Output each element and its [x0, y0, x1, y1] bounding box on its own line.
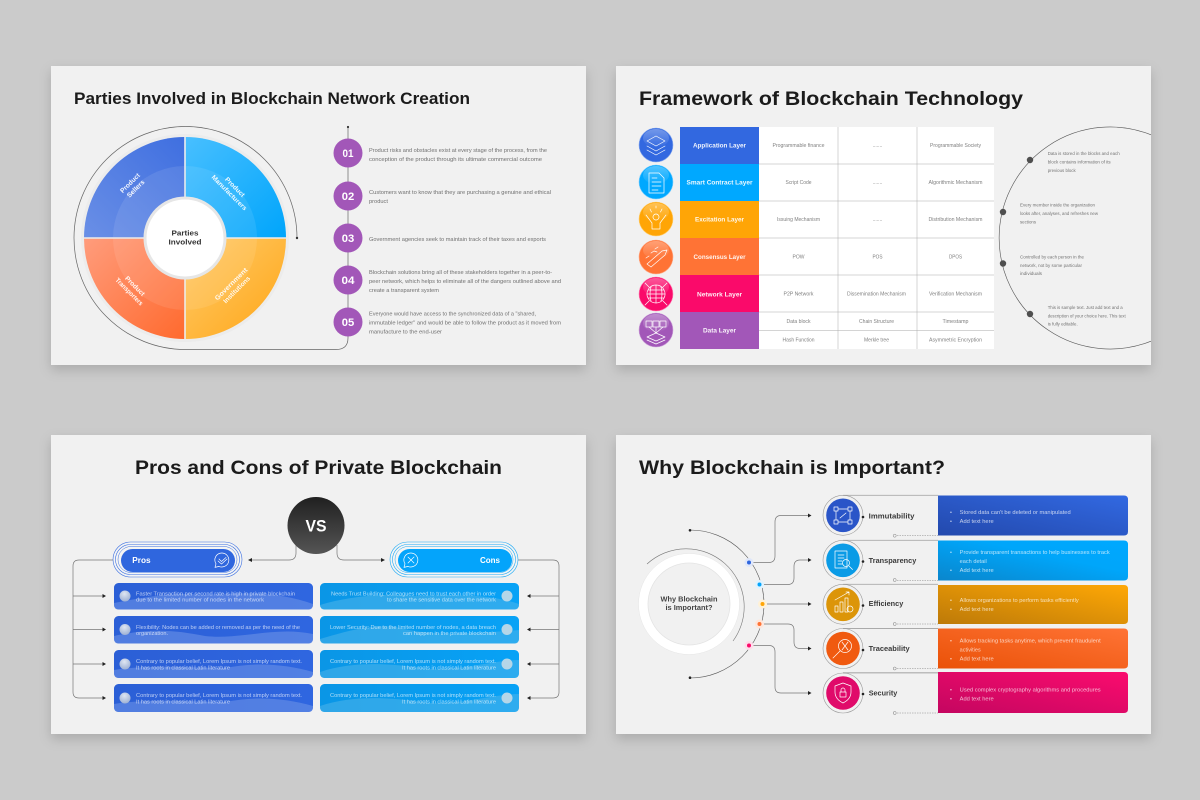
row: efficiency — [823, 584, 1128, 626]
pros row 2: Flexibility: Nodes can be added or removed as per the need of the — [136, 625, 300, 631]
panel: why blockchain is important — [616, 435, 1151, 734]
timeline end dot — [347, 126, 349, 128]
note 4: description of your choice here. This text — [1048, 314, 1126, 318]
description: immutability: Stored data can't be deleted or manipulated — [960, 510, 1071, 516]
step 04: peer network, which helps to eliminate all of the dangers outlined above and — [369, 279, 561, 285]
title: why blockchain: Why Blockchain is Important? — [639, 458, 945, 479]
cons row 2 — [320, 616, 519, 644]
central circle: Why Blockchain — [660, 594, 718, 604]
panel: framework of blockchain technology — [616, 66, 1151, 365]
table cells: Dissemination Mechanism — [847, 292, 906, 298]
layer: excitation — [680, 201, 759, 238]
pros row 1 — [114, 583, 313, 610]
step 05: 05 — [342, 317, 354, 329]
description: security: Add text here — [960, 696, 994, 702]
arc end dot — [296, 237, 298, 239]
icon: traceability — [826, 632, 860, 665]
pros row 3: Contrary to popular belief, Lorem Ipsum is not simply random text. — [136, 659, 302, 665]
note 4: This is sample text. Just add text and a — [1048, 305, 1123, 310]
icon: cross bubble — [404, 553, 418, 567]
cons pill — [390, 542, 518, 577]
description: traceability: • — [950, 656, 952, 662]
table cells: Asymmetric Encryption — [929, 338, 982, 344]
cons row 3: Contrary to popular belief, Lorem Ipsum is not simply random text. — [330, 659, 496, 665]
pros row 1: due to the limited number of nodes in the network — [136, 597, 264, 603]
step 02 — [334, 182, 551, 210]
step 04: Blockchain solutions bring all of these stakeholders together in a peer-to- — [369, 270, 552, 276]
step 03 — [334, 224, 546, 252]
node dots — [744, 558, 767, 650]
segment: product transporters: Transporters — [114, 277, 144, 308]
description: traceability: • — [950, 638, 952, 644]
note 2: sections — [1020, 220, 1037, 224]
table cells: Programmable finance — [772, 143, 825, 149]
segment: government institutions: Government — [214, 266, 250, 302]
description: security: • — [950, 696, 952, 702]
segment: product transporters: Product — [123, 275, 146, 298]
step 02: 02 — [342, 191, 354, 203]
description: efficiency: Allows organizations to perform tasks efficiently — [960, 598, 1079, 604]
layer: application: Application Layer — [693, 142, 746, 150]
step 04: create a transparent system — [369, 288, 439, 294]
table cells: P2P Network — [784, 292, 814, 298]
layer: smart contract — [680, 164, 759, 201]
icon: smart contract document — [639, 165, 673, 199]
segment: product sellers — [84, 137, 184, 237]
note 1: previous block — [1048, 168, 1076, 173]
step 01: 01 — [342, 148, 354, 160]
description: efficiency: • — [950, 607, 952, 613]
table — [680, 127, 994, 349]
table cells: DPOS — [949, 254, 963, 260]
layer icons — [639, 128, 673, 347]
cons row 1: to share the sensitive data over the network — [387, 597, 496, 603]
note 2 — [1020, 202, 1099, 224]
table cells: Verification Mechanism — [929, 292, 982, 298]
note 4 — [1048, 305, 1126, 326]
layer: consensus: Consensus Layer — [694, 254, 746, 261]
description: transparency: Add text here — [960, 568, 994, 574]
cons pill: Cons — [480, 556, 501, 565]
step 03: 03 — [342, 233, 354, 245]
table cells: Programmable Society — [930, 143, 982, 149]
layer: consensus — [680, 238, 759, 275]
step 02: Customers want to know that they are purchasing a genuine and ethical — [369, 190, 551, 196]
table cells: Hash Function — [782, 338, 815, 344]
table cells: ....... — [873, 217, 882, 223]
step 01 — [334, 138, 547, 168]
description: traceability: Add text here — [960, 656, 994, 662]
pros row 2 — [114, 616, 313, 644]
wheel centre: Involved — [168, 238, 202, 246]
row: immutability: Immutability — [869, 512, 915, 520]
step 02: product — [369, 199, 388, 205]
cons row 3: It has roots in classical Latin literature — [402, 665, 496, 671]
VS badge: VS — [306, 518, 326, 536]
step 03: Government agencies seek to maintain track of their taxes and exports — [369, 237, 546, 243]
note 1 — [1048, 151, 1120, 173]
row: efficiency: Efficiency — [869, 599, 904, 608]
segment: product manufacturers: Manufacturers — [210, 174, 248, 213]
description: immutability — [938, 496, 1128, 536]
note 3 — [1020, 254, 1084, 276]
row: immutability — [823, 495, 1128, 537]
table cells: Distribution Mechanism — [928, 217, 982, 223]
cons row 1: Needs Trust Building: Colleagues need to trust each other in order — [331, 592, 496, 598]
description: security — [938, 672, 1128, 713]
pros row 3: It has roots in classical Latin literature — [136, 665, 230, 671]
connectors — [752, 514, 812, 695]
description: transparency: each detail — [960, 559, 987, 565]
cons row 2: Lower Security: Due to the limited number of nodes, a data breach — [330, 625, 496, 631]
step 05: manufacture to the end-user — [369, 330, 442, 336]
segment: product sellers: Sellers — [126, 179, 147, 199]
icon: immutability — [826, 498, 860, 532]
description: traceability — [938, 628, 1128, 668]
central circle: is Important? — [666, 603, 713, 612]
table cells: Timestamp — [942, 319, 969, 325]
layer: data — [680, 312, 759, 349]
pros pill — [113, 542, 242, 577]
icon: check bubble — [215, 553, 229, 567]
connector arc and timeline line — [74, 127, 348, 349]
step 05: immutable ledger" and would be able to follow the product as it moved from — [369, 320, 561, 326]
cons row 4 — [320, 684, 519, 712]
icon: application layer stack — [639, 128, 673, 162]
note 4: is fully editable. — [1048, 322, 1078, 326]
segment: product manufacturers: Product — [223, 176, 246, 199]
step 04: 04 — [342, 275, 355, 287]
note 2: looks after, analyses, and refreshes new — [1020, 211, 1099, 216]
cons row 1 — [320, 583, 519, 610]
table cells: Algorithmic Mechanism — [928, 180, 982, 186]
wheel diagram — [81, 134, 289, 342]
layer: data: Data Layer — [703, 328, 736, 334]
pros row 4 — [114, 684, 313, 712]
step 01: Product risks and obstacles exist at every stage of the process, from the — [369, 148, 547, 154]
segment: government institutions — [186, 239, 286, 339]
pros row 3 — [114, 650, 313, 678]
step 05 — [334, 308, 561, 336]
icon: transparency — [826, 544, 860, 577]
row: traceability — [823, 628, 1128, 670]
layer: network: Network Layer — [697, 292, 742, 298]
segment: government institutions: Institutions — [222, 275, 252, 305]
description: efficiency: Add text here — [960, 607, 994, 613]
table cells: ....... — [873, 180, 882, 186]
title: pros and cons: Pros and Cons of Private Blockchain — [135, 458, 502, 479]
description: transparency: Provide transparent transactions to help businesses to track — [960, 550, 1110, 556]
VS badge — [288, 497, 344, 554]
description: immutability: • — [950, 519, 952, 525]
row: transparency: Transparency — [869, 556, 917, 565]
table cells — [772, 143, 982, 344]
layer: network — [680, 275, 759, 312]
note 3: network, not by some particular — [1020, 263, 1082, 268]
title: framework: Framework of Blockchain Technology — [639, 88, 1023, 110]
table cells: Script Code — [786, 180, 812, 186]
cons row 2: can happen in the private blockchain — [403, 631, 496, 637]
description: transparency: • — [950, 550, 952, 556]
table cells: POS — [872, 254, 883, 260]
icon: network globe — [639, 277, 673, 311]
description: traceability: activities — [960, 648, 981, 654]
central circle — [638, 554, 740, 654]
description: transparency: • — [950, 568, 952, 574]
step 04 — [334, 266, 561, 294]
cons row 3 — [320, 650, 519, 678]
note 2: Every member inside the organization — [1020, 202, 1095, 208]
wheel centre — [144, 196, 226, 280]
description: traceability: Allows tracking tasks anytime, which prevent fraudulent — [960, 638, 1101, 644]
icon: consensus hands — [639, 240, 673, 274]
description: immutability: • — [950, 510, 952, 516]
pros pill: Pros — [132, 556, 151, 565]
step 05: Everyone would have access to the synchronized data of a "shared, — [369, 312, 536, 318]
arcs — [647, 529, 764, 679]
step 01: conception of the product through its ultimate commercial outcome — [369, 157, 542, 163]
row: security: Security — [869, 688, 898, 698]
table body — [680, 127, 994, 349]
segment: product manufacturers — [186, 137, 286, 237]
table cells: ....... — [873, 143, 882, 149]
description: security: Used complex cryptography algorithms and procedures — [960, 688, 1101, 694]
table cells: Chain Structure — [859, 319, 894, 325]
description: efficiency — [938, 585, 1128, 624]
description: immutability: Add text here — [960, 519, 994, 525]
pros row 2: organization. — [136, 631, 168, 637]
table cells: POW — [792, 254, 805, 260]
panel: pros and cons — [51, 435, 586, 734]
connectors — [73, 545, 559, 700]
title: parties involved: Parties Involved in Blockchain Network Creation — [74, 90, 470, 108]
pros row 4: Contrary to popular belief, Lorem Ipsum is not simply random text. — [136, 693, 302, 699]
table cells: Data block — [786, 319, 811, 325]
icon: excitation person — [639, 202, 673, 236]
segment: product transporters — [84, 239, 184, 339]
icon: efficiency — [826, 588, 860, 621]
row: traceability: Traceability — [869, 644, 911, 653]
icon: data layer — [639, 313, 673, 347]
layer: excitation: Excitation Layer — [695, 216, 744, 224]
table cells: Issuing Mechanism — [777, 217, 820, 223]
layer: smart contract: Smart Contract Layer — [686, 180, 753, 186]
segment: product sellers: Product — [119, 172, 142, 195]
panel: parties involved — [51, 66, 586, 365]
description: efficiency: • — [950, 598, 952, 604]
icon: security — [826, 676, 860, 710]
description: transparency — [938, 540, 1128, 580]
note 3: individuals — [1020, 271, 1043, 276]
wheel centre: Parties — [172, 228, 198, 238]
pros row 4: It has roots in classical Latin literature — [136, 699, 230, 705]
note 1: Data is stored in the blocks and each — [1048, 151, 1120, 156]
note 1: block contains information of its — [1048, 160, 1111, 164]
layer: application — [680, 127, 759, 164]
right arc with notes — [999, 127, 1151, 349]
table cells: Merkle tree — [864, 338, 889, 344]
pros row 1: Faster Transaction per second rate is high in private blockchain — [136, 592, 295, 598]
description: security: • — [950, 688, 952, 694]
row: security — [823, 672, 1128, 714]
row: transparency — [823, 540, 1128, 582]
cons row 4: It has roots in classical Latin literature — [402, 699, 496, 705]
note 3: Controlled by each person in the — [1020, 254, 1084, 260]
cons row 4: Contrary to popular belief, Lorem Ipsum is not simply random text. — [330, 693, 496, 699]
